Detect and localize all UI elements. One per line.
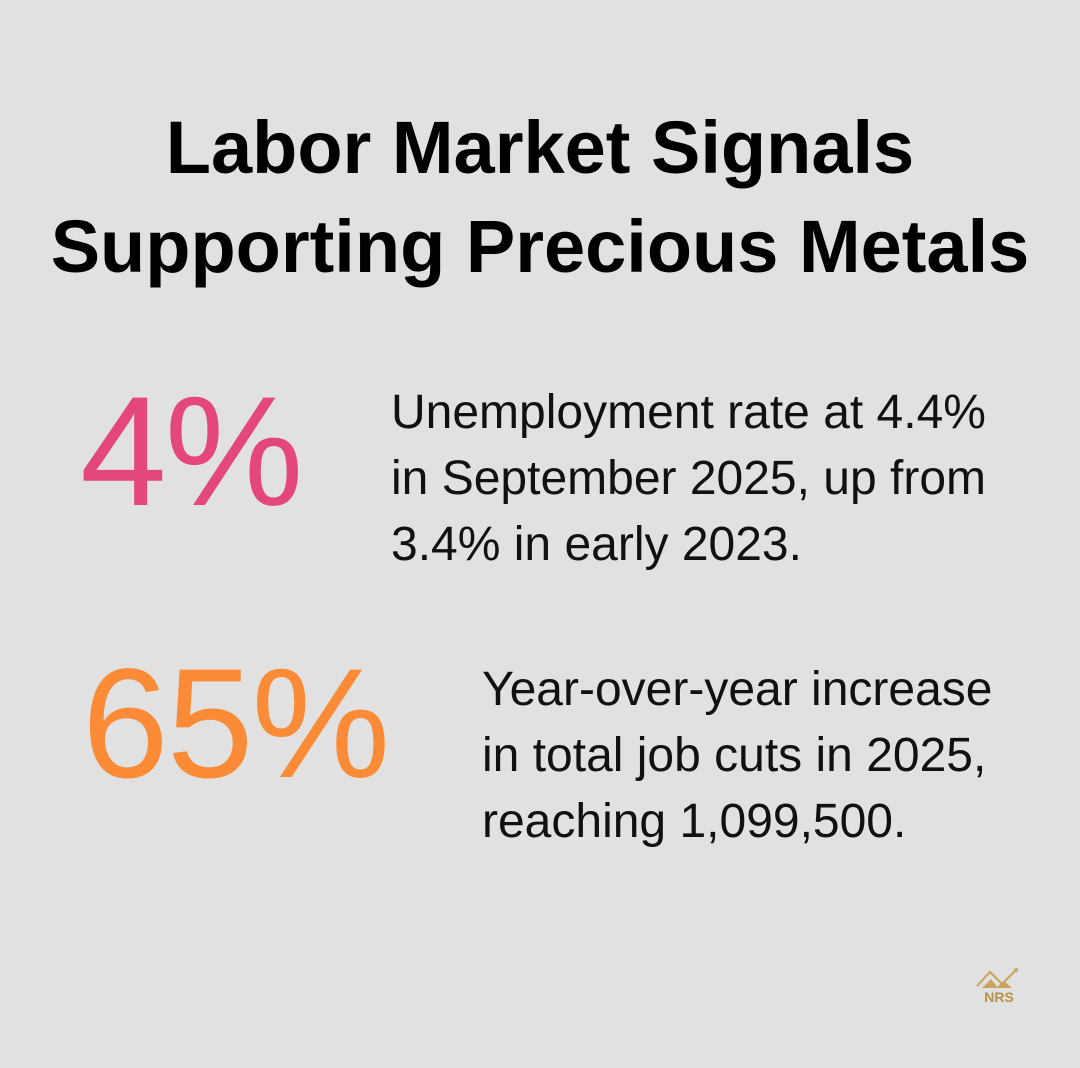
text: job cuts (482, 663, 992, 848)
text: job cuts: reaching 1,099,500. (482, 795, 906, 848)
stat: 65%: 65% (82, 637, 388, 811)
title: Supporting Precious Metals (51, 205, 1029, 288)
text: job cuts: Year-over-year increase (482, 663, 992, 716)
title: Labor Market Signals (166, 106, 914, 189)
stat: 4%: 4% (80, 365, 301, 539)
text: unemployment: Unemployment rate at 4.4% (391, 386, 986, 439)
logo: NRS: NRS (984, 989, 1014, 1005)
logo: NRS (976, 968, 1018, 1005)
text: unemployment: in September 2025, up from (391, 452, 986, 505)
text: unemployment: 3.4% in early 2023. (391, 518, 802, 571)
text: unemployment (391, 386, 986, 571)
title (51, 106, 1029, 288)
text: job cuts: in total job cuts in 2025, (482, 729, 986, 782)
